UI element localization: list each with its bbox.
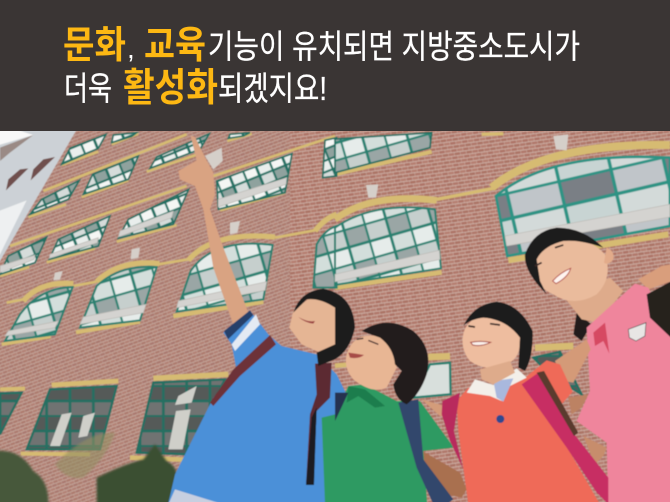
head <box>463 316 520 368</box>
raised arm <box>638 264 670 289</box>
pointing arm <box>178 136 248 329</box>
arms <box>422 399 448 418</box>
cream arches <box>23 145 670 301</box>
lower right window with sign <box>413 363 451 398</box>
brick building <box>0 121 670 502</box>
neck <box>563 278 623 323</box>
navy backpack straps <box>398 399 453 502</box>
child 4: girl in pink <box>525 228 670 502</box>
title line 1: , <box>127 33 135 64</box>
upper windows <box>0 133 432 274</box>
left hand and arm <box>422 451 467 498</box>
title line 2: 더욱 <box>64 70 112 107</box>
child 3: girl in orange <box>422 302 608 502</box>
pink shirt <box>577 284 670 502</box>
title line 1: 문화 <box>63 25 126 67</box>
orange shirt <box>457 360 600 502</box>
bushes <box>0 433 177 502</box>
head <box>346 336 397 390</box>
large arched window <box>496 157 670 256</box>
arched windows <box>5 207 441 341</box>
magenta backpack straps <box>522 372 608 502</box>
maroon backpack straps <box>210 335 276 406</box>
cream bands <box>0 134 668 465</box>
black strap <box>647 281 670 338</box>
lower hair <box>573 313 592 341</box>
blue shirt <box>168 310 347 502</box>
neighbouring white building <box>0 121 82 264</box>
lower window reflections <box>50 386 197 449</box>
title panel <box>0 0 670 131</box>
title line 1: 교육 <box>144 25 206 67</box>
ornament stones <box>53 134 568 280</box>
balcony rails <box>0 178 670 336</box>
photo: school building and children <box>0 121 670 502</box>
lower windows <box>0 352 582 454</box>
child 2: boy in green <box>322 323 467 502</box>
shirt badge <box>628 323 646 341</box>
collar <box>467 368 527 401</box>
head <box>533 237 608 301</box>
green shirt <box>322 384 454 502</box>
title line 2: 활성화 <box>123 67 218 110</box>
title line 1 <box>63 25 580 67</box>
child 1: boy in blue pointing up <box>168 136 355 502</box>
head <box>289 294 337 353</box>
title line 2 <box>64 67 327 110</box>
title line 1: 기능이 유치되면 지방중소도시가 <box>208 28 580 65</box>
title line 2: 되겠지요! <box>218 70 327 107</box>
